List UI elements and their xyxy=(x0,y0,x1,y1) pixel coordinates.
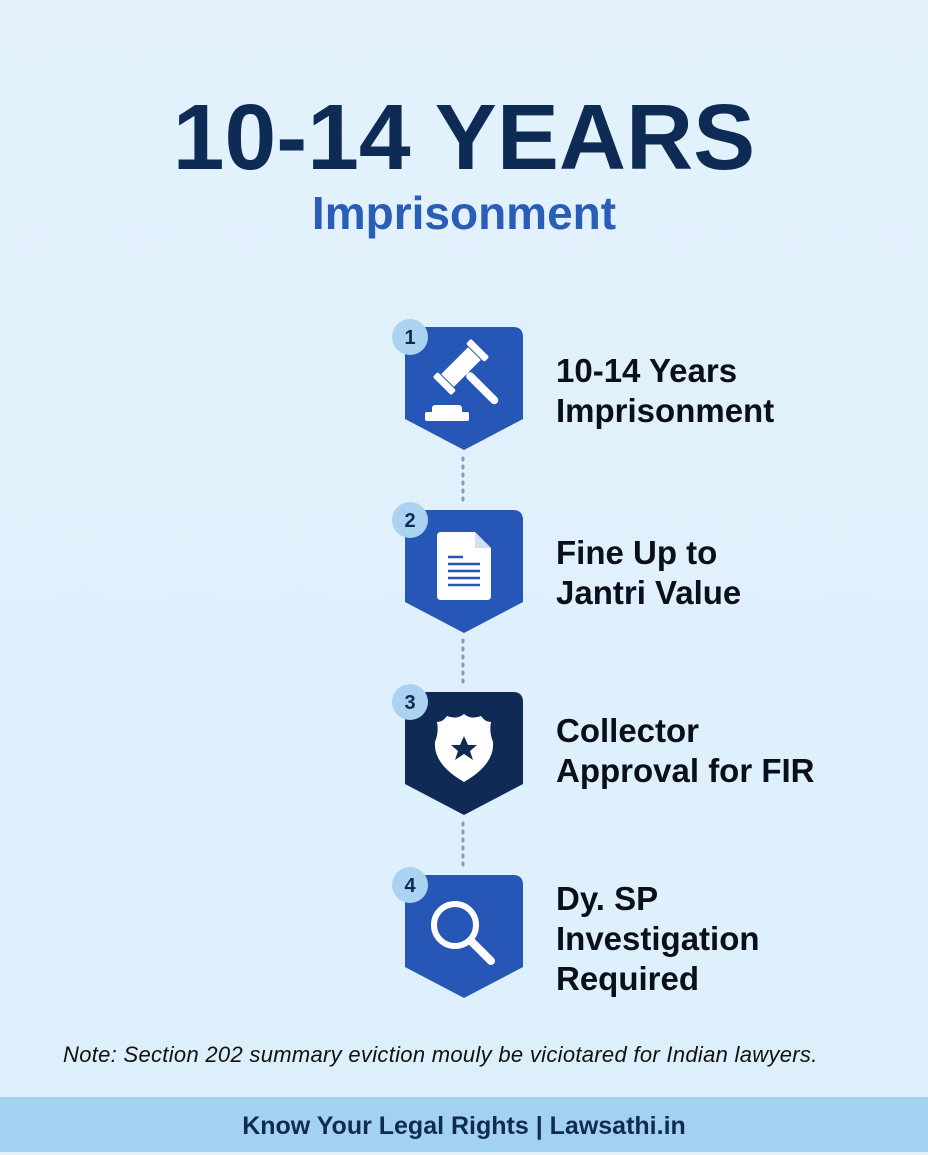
step 2 text xyxy=(556,534,741,611)
title: 10-14 YEARS xyxy=(173,85,755,189)
step 1 text: Imprisonment xyxy=(556,392,774,429)
step 3 text: Approval for FIR xyxy=(556,752,815,789)
step 3: police badge xyxy=(405,692,523,815)
number badges: 2 xyxy=(404,510,416,532)
step 3 text: Collector xyxy=(556,712,699,749)
step 4: magnifier xyxy=(405,875,523,998)
step 2: document xyxy=(405,510,523,633)
step 1 text: 10-14 Years xyxy=(556,352,737,389)
number badges xyxy=(392,319,428,903)
note: Note: Section 202 summary eviction mouly be viciotared for Indian lawyers. xyxy=(63,1042,818,1067)
subtitle: Imprisonment xyxy=(312,187,616,239)
step 2 text: Jantri Value xyxy=(556,574,741,611)
number badges: 4 xyxy=(404,875,416,897)
step 2 text: Fine Up to xyxy=(556,534,717,571)
connector dots xyxy=(462,458,464,870)
step 4 text: Required xyxy=(556,960,699,997)
step 4 text: Dy. SP xyxy=(556,880,658,917)
step 1 text xyxy=(556,352,774,429)
step 1: gavel xyxy=(405,327,523,450)
footer band: Know Your Legal Rights | Lawsathi.in xyxy=(242,1112,686,1140)
footer band xyxy=(0,1097,928,1152)
number badges: 3 xyxy=(404,692,416,714)
step 3 text xyxy=(556,712,815,789)
step 4 text: Investigation xyxy=(556,920,760,957)
step 4 text xyxy=(556,880,760,997)
number badges: 1 xyxy=(404,327,416,349)
